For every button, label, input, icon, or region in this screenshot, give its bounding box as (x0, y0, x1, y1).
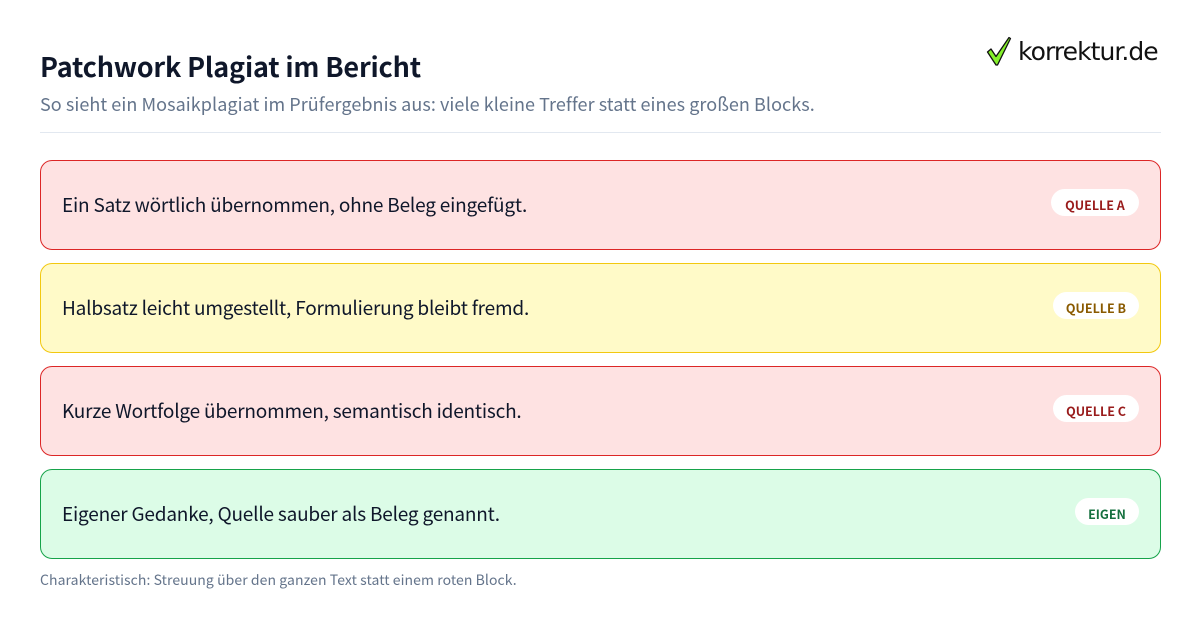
title: Patchwork Plagiat im Bericht (40, 46, 421, 85)
logo: korrektur.de: korrektur.de (1018, 37, 1158, 66)
row: Quelle A: Ein Satz wörtlich übernommen, ohne Beleg eingefügt. (62, 191, 527, 218)
row: Quelle C: Kurze Wortfolge übernommen, semantisch identisch. (62, 397, 522, 424)
badge: Eigen: EIGEN (1088, 504, 1126, 523)
row: Quelle B (40, 263, 1161, 353)
row: Quelle B: Halbsatz leicht umgestellt, Formulierung bleibt fremd. (62, 294, 529, 321)
badge: Quelle C: QUELLE C (1066, 401, 1126, 420)
row: Eigen (40, 469, 1161, 559)
row: Quelle C (40, 366, 1161, 456)
row: Eigen: Eigener Gedanke, Quelle sauber als Beleg genannt. (62, 500, 500, 527)
subtitle: So sieht ein Mosaikplagiat im Prüfergebnis aus: viele kleine Treffer statt eines großen Blocks. (40, 91, 815, 117)
badge: Quelle C (1053, 395, 1139, 422)
row: Quelle A (40, 160, 1161, 250)
badge: Eigen (1075, 498, 1139, 525)
badge: Quelle B (1053, 292, 1139, 319)
divider (40, 132, 1161, 133)
badge: Quelle A: QUELLE A (1065, 195, 1125, 214)
badge: Quelle B: QUELLE B (1066, 298, 1126, 317)
badge: Quelle A (1051, 189, 1139, 216)
footnote: Charakteristisch: Streuung über den ganzen Text statt einem roten Block. (40, 570, 517, 590)
